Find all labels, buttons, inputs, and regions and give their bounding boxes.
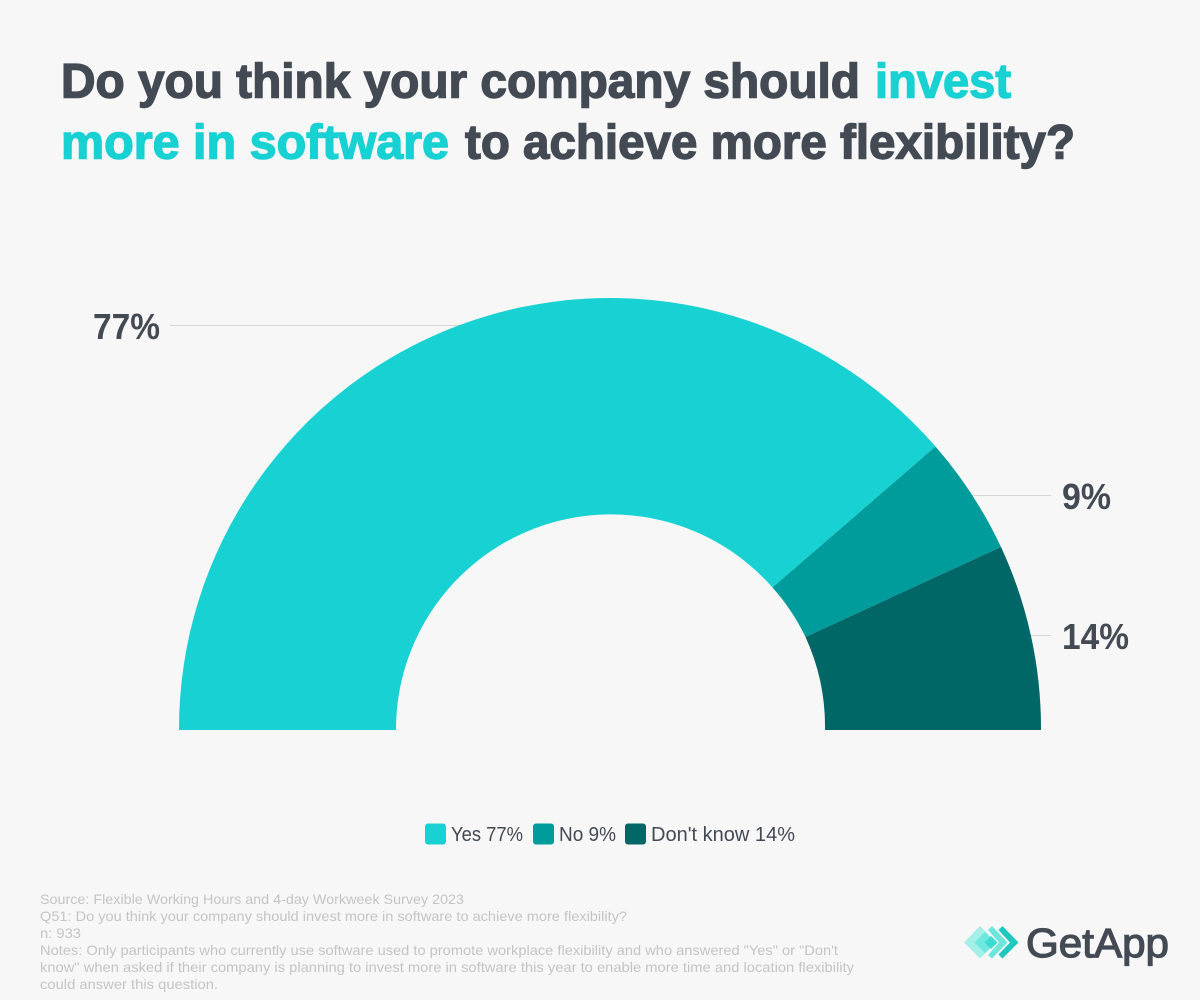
title: invest: [875, 56, 1011, 108]
value label: 14%: 14%: [1062, 616, 1129, 657]
legend: [425, 824, 795, 846]
value label: 77%: 77%: [93, 306, 160, 347]
legend item: No: No 9%: [559, 824, 616, 846]
wordmark: GetApp: [1026, 920, 1169, 966]
legend item: Yes: [425, 824, 523, 846]
source notes: [40, 891, 854, 992]
source notes: Source: Flexible Working Hours and 4-day Workweek Survey 2023: [40, 891, 464, 907]
semi-donut chart: [179, 298, 1041, 730]
title: Do you think your company should: [61, 56, 860, 108]
source notes: could answer this question.: [40, 976, 218, 992]
source notes: Q51: Do you think your company should invest more in software to achieve more flexibility?: [40, 908, 627, 924]
legend item: Yes: Yes 77%: [451, 824, 523, 846]
legend item: Don't know: Don't know 14%: [651, 824, 795, 846]
title: more in software: [61, 116, 449, 170]
segment: No 9%: [772, 446, 1001, 637]
icon: GetApp diamonds: [964, 926, 1018, 958]
source notes: Notes: Only participants who currently use software used to promote workplace flexibility and who answered "Yes" or "Don't: [40, 942, 838, 958]
source notes: n: 933: [40, 925, 81, 941]
segment: Don't know 14%: [806, 547, 1041, 730]
title: to achieve more flexibility?: [465, 116, 1075, 170]
title: [61, 56, 1075, 170]
segment: Yes 77%: [179, 298, 936, 730]
leader lines: [170, 326, 1051, 636]
value label: 9%: 9%: [1062, 476, 1111, 517]
source notes: know" when asked if their company is planning to invest more in software this year to enable more time and location flexibility: [40, 959, 854, 975]
legend item: No: [533, 824, 616, 846]
GetApp logo: [964, 920, 1169, 966]
